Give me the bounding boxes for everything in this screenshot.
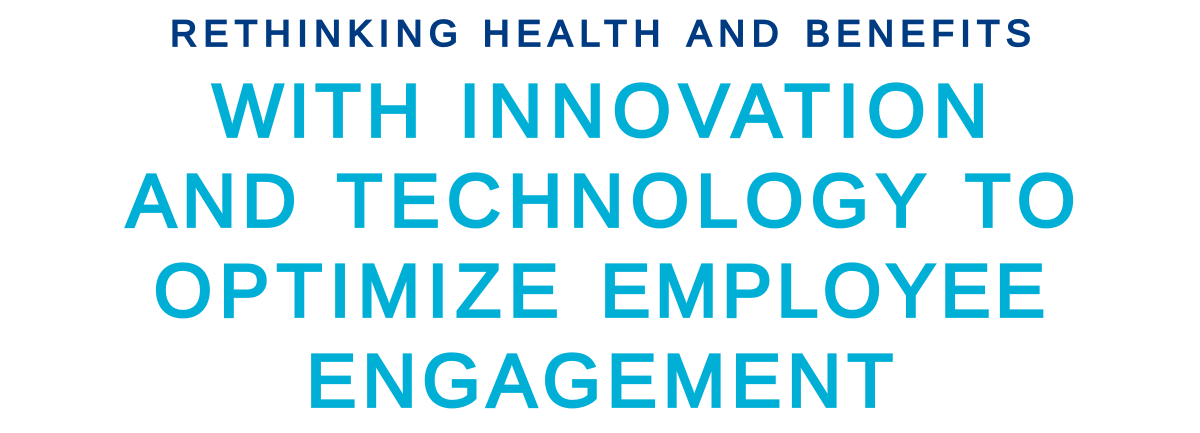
subtitle: BENEFITS <box>805 13 1031 54</box>
title line 2: TECHNOLOGY <box>337 158 926 242</box>
title line 4: ENGAGEMENT <box>306 339 893 423</box>
title <box>126 68 1075 423</box>
title line 1 <box>212 68 988 152</box>
title line 3: OPTIMIZE <box>154 248 559 332</box>
subtitle: HEALTH <box>483 13 660 54</box>
subtitle <box>170 13 1031 54</box>
title line 2 <box>126 158 1075 242</box>
title line 1: WITH <box>212 68 421 152</box>
subtitle: AND <box>687 13 779 54</box>
title line 2: TO <box>965 158 1075 242</box>
title line 1: INNOVATION <box>459 68 988 152</box>
subtitle: RETHINKING <box>170 13 458 54</box>
title line 2: AND <box>126 158 296 242</box>
title line 3 <box>154 248 1045 332</box>
title line 3: EMPLOYEE <box>600 248 1045 332</box>
